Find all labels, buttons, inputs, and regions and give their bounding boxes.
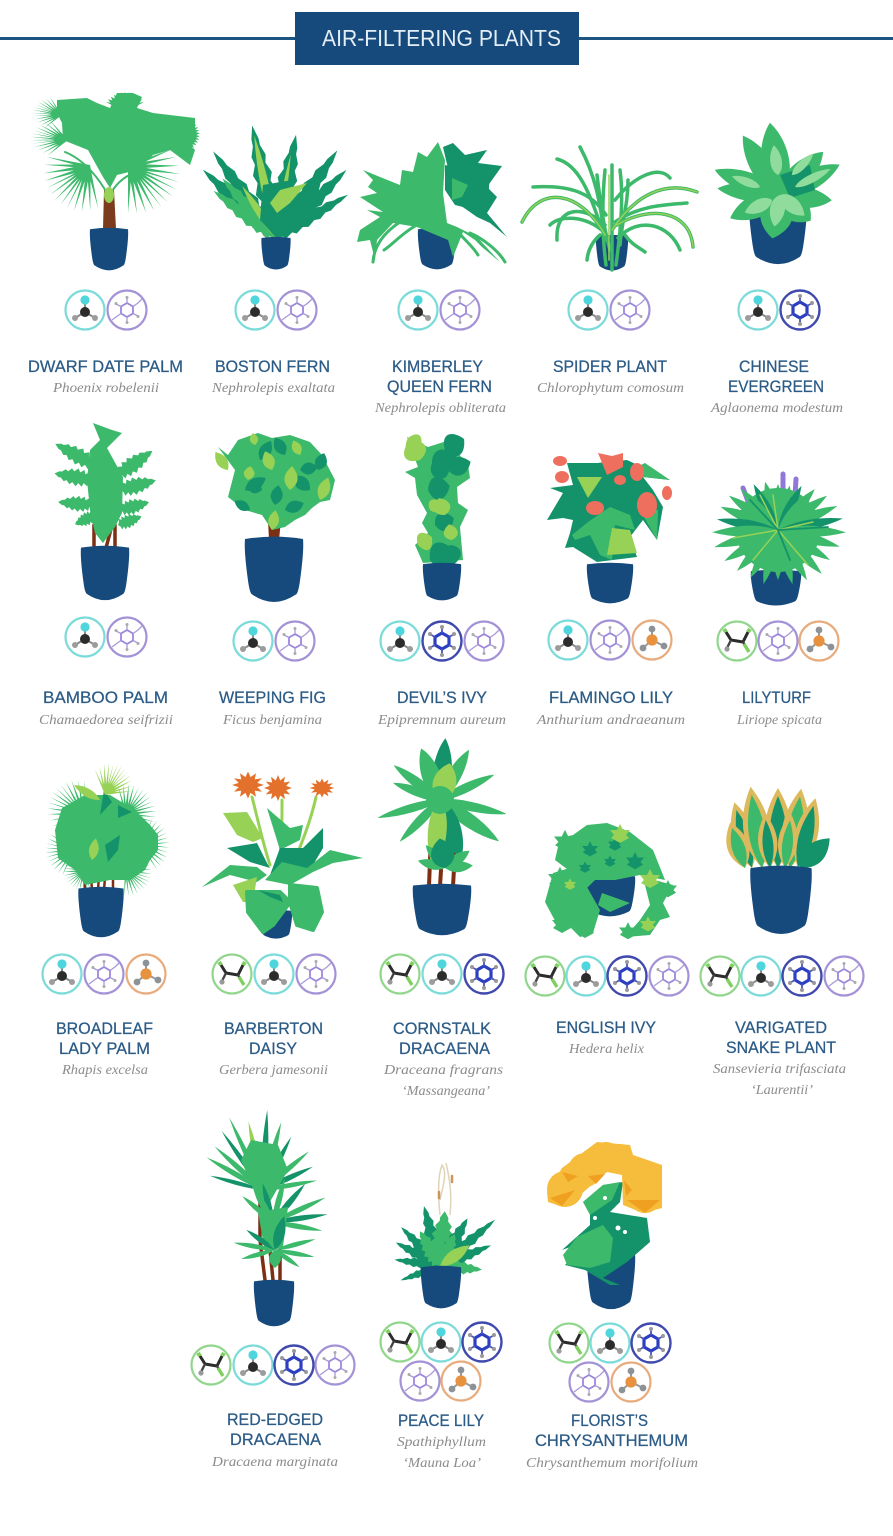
name: broadleaf lady palm: LADY PALM: [59, 1040, 150, 1058]
name: broadleaf lady palm: [56, 1020, 153, 1058]
name: red-edged dracaena: DRACAENA: [230, 1431, 321, 1449]
icon: trichloroethylene: [192, 1346, 230, 1384]
icon: formaldehyde: [42, 954, 82, 994]
name: kimberley queen fern: QUEEN FERN: [387, 378, 492, 396]
plant: red-edged dracaena: [205, 1110, 328, 1326]
chemical icons: [236, 290, 316, 330]
panel: spider plant: [522, 147, 697, 395]
panel: english ivy: [526, 823, 688, 1056]
icon: ammonia: [632, 620, 672, 660]
name: weeping fig: WEEPING FIG: [219, 689, 326, 707]
icon: ammonia: [612, 1362, 650, 1402]
chemical icons: [526, 956, 688, 996]
icon: formaldehyde: [548, 620, 588, 660]
species: draceana fragrans massangeana: Draceana fragrans: [383, 1062, 503, 1077]
plant: kimberley queen fern: [357, 142, 507, 269]
panel: dwarf date palm: [28, 92, 201, 395]
icon: formaldehyde: [66, 618, 104, 656]
panel: varigated snake plant: [700, 785, 864, 1097]
species: chlorophytum comosum: Chlorophytum comosum: [537, 380, 684, 395]
icon: formaldehyde: [254, 954, 294, 994]
panel: devil's ivy: [377, 429, 506, 727]
icon: formaldehyde: [568, 290, 608, 330]
icon: xylene: [464, 622, 504, 660]
species: draceana fragrans massangeana: ‘Massangeana’: [402, 1083, 491, 1098]
plant: spider plant: [522, 147, 697, 270]
name: chinese evergreen: CHINESE: [739, 358, 809, 376]
icon: xylene: [278, 290, 316, 330]
icon: formaldehyde: [380, 622, 420, 660]
name: florist's chrysanthemum: [535, 1412, 688, 1450]
species: dracaena marginata: Dracaena marginata: [211, 1454, 338, 1469]
icon: trichloroethylene: [526, 956, 564, 996]
species: spathiphyllum mauna loa: ‘Mauna Loa’: [403, 1455, 482, 1470]
plant: boston fern: [197, 123, 353, 270]
name: varigated snake plant: SNAKE PLANT: [726, 1039, 836, 1057]
chemical icons: [380, 1322, 502, 1400]
icon: xylene: [84, 954, 124, 994]
chemical icons: [192, 1346, 354, 1384]
panel: cornstalk dracaena: [376, 737, 507, 1098]
name: barberton daisy: BARBERTON: [224, 1020, 323, 1038]
icon: benzene: [274, 1346, 314, 1384]
plant: broadleaf lady palm: [36, 755, 172, 937]
chemical icons: [700, 956, 864, 996]
panel: barberton daisy: [202, 772, 363, 1077]
name: lilyturf: LILYTURF: [742, 689, 811, 707]
panel: boston fern: [197, 123, 353, 395]
icon: benzene: [462, 1322, 502, 1362]
icon: formaldehyde: [742, 956, 780, 996]
species: nephrolepis obliterata: Nephrolepis obliterata: [374, 400, 506, 415]
icon: formaldehyde: [566, 956, 606, 996]
name: red-edged dracaena: [227, 1411, 323, 1449]
icon: formaldehyde: [590, 1324, 630, 1362]
name: bamboo palm: BAMBOO PALM: [43, 689, 168, 707]
plant: devil's ivy: [399, 429, 474, 600]
name: florist's chrysanthemum: FLORIST’S: [571, 1412, 648, 1430]
name: barberton daisy: [224, 1020, 323, 1058]
icon: xylene: [610, 290, 650, 330]
name: devil's ivy: DEVIL’S IVY: [397, 689, 487, 707]
species: phoenix robelenii: Phoenix robelenii: [52, 380, 159, 395]
header rule: [0, 37, 893, 40]
panel: bamboo palm: [39, 423, 173, 727]
icon: benzene: [608, 956, 646, 996]
species: sansevieria trifasciata laurentii: [713, 1061, 846, 1097]
chemical icons: [568, 290, 650, 330]
chemical icons: [380, 954, 504, 994]
species: chrysanthemum morifolium: Chrysanthemum morifolium: [526, 1455, 698, 1470]
icon: formaldehyde: [66, 290, 104, 330]
icon: xylene: [108, 290, 146, 330]
chemical icons: [398, 290, 480, 330]
icon: ammonia: [800, 622, 838, 660]
species: sansevieria trifasciata laurentii: ‘Laurentii’: [751, 1082, 814, 1097]
name: flamingo lily: FLAMINGO LILY: [549, 689, 673, 707]
species: nephrolepis exaltata: Nephrolepis exaltata: [211, 380, 335, 395]
panel: flamingo lily: [536, 453, 685, 727]
name: dwarf date palm: DWARF DATE PALM: [28, 358, 183, 376]
icon: trichloroethylene: [212, 954, 252, 994]
chemical icons: [738, 290, 820, 330]
plant: peace lily: [393, 1163, 499, 1308]
icon: xylene: [758, 622, 798, 660]
icon: trichloroethylene: [380, 954, 420, 994]
icon: xylene: [316, 1346, 354, 1384]
panel: chinese evergreen: [710, 121, 844, 415]
icon: benzene: [780, 290, 820, 330]
species: anthurium andraeanum: Anthurium andraeanum: [536, 712, 685, 727]
plant: chinese evergreen: [711, 121, 844, 264]
panel: red-edged dracaena: [192, 1110, 354, 1469]
icon: xylene: [276, 622, 314, 660]
icon: benzene: [464, 954, 504, 994]
plant: varigated snake plant: [720, 785, 837, 934]
panel: lilyturf: [712, 474, 846, 727]
chemical icons: [66, 290, 146, 330]
plant: lilyturf: [712, 474, 846, 605]
name: barberton daisy: DAISY: [249, 1040, 297, 1058]
name: peace lily: PEACE LILY: [398, 1412, 484, 1430]
name: cornstalk dracaena: DRACAENA: [399, 1040, 490, 1058]
name: florist's chrysanthemum: CHRYSANTHEMUM: [535, 1432, 688, 1450]
chemical icons: [42, 954, 166, 994]
chemical icons: [550, 1324, 670, 1402]
pot: boston fern: [261, 237, 291, 270]
icon: benzene: [782, 956, 822, 996]
name: chinese evergreen: [728, 358, 824, 396]
icon: formaldehyde: [738, 290, 778, 330]
plant: english ivy: [545, 823, 677, 939]
chemical icons: [548, 620, 672, 660]
panel: florist's chrysanthemum: [526, 1142, 698, 1470]
species: sansevieria trifasciata laurentii: Sansevieria trifasciata: [713, 1061, 846, 1076]
icon: formaldehyde: [236, 290, 274, 330]
species: rhapis excelsa: Rhapis excelsa: [61, 1062, 148, 1077]
panel: broadleaf lady palm: [36, 755, 172, 1077]
species: gerbera jamesonii: Gerbera jamesonii: [219, 1062, 328, 1077]
icon: formaldehyde: [398, 290, 438, 330]
panel: weeping fig: [211, 432, 335, 727]
title banner: [295, 12, 579, 65]
chemical icons: [234, 622, 314, 660]
name: red-edged dracaena: RED-EDGED: [227, 1411, 323, 1429]
icon: ammonia: [126, 954, 166, 994]
species: spathiphyllum mauna loa: Spathiphyllum: [397, 1434, 486, 1449]
name: chinese evergreen: EVERGREEN: [728, 378, 824, 396]
species: spathiphyllum mauna loa: [397, 1434, 486, 1470]
icon: trichloroethylene: [380, 1322, 420, 1362]
chemical icons: [380, 622, 504, 660]
name: kimberley queen fern: KIMBERLEY: [392, 358, 483, 376]
icon: xylene: [590, 620, 630, 660]
icon: xylene: [650, 956, 688, 996]
icon: xylene: [400, 1362, 440, 1400]
icon: formaldehyde: [234, 622, 272, 660]
icon: xylene: [296, 954, 336, 994]
name: kimberley queen fern: [387, 358, 492, 396]
title banner: AIR-FILTERING PLANTS: [322, 25, 561, 51]
plant: flamingo lily: [547, 453, 672, 603]
plant: cornstalk dracaena: [376, 737, 507, 935]
species: aglaonema modestum: Aglaonema modestum: [710, 400, 843, 415]
name: varigated snake plant: [726, 1019, 836, 1057]
plant: bamboo palm: [51, 423, 158, 600]
icon: ammonia: [442, 1362, 480, 1400]
panel: peace lily: [380, 1163, 502, 1470]
icon: xylene: [440, 290, 480, 330]
icon: benzene: [422, 622, 462, 660]
icon: formaldehyde: [422, 954, 462, 994]
name: cornstalk dracaena: [393, 1020, 491, 1058]
plant: weeping fig: [211, 432, 335, 602]
species: liriope spicata: Liriope spicata: [736, 712, 822, 727]
icon: trichloroethylene: [700, 956, 740, 996]
species: ficus benjamina: Ficus benjamina: [222, 712, 322, 727]
icon: trichloroethylene: [550, 1324, 588, 1362]
plant: dwarf date palm: [29, 92, 201, 270]
panel: kimberley queen fern: [357, 142, 507, 415]
icon: formaldehyde: [234, 1346, 272, 1384]
icon: benzene: [632, 1324, 670, 1362]
icon: trichloroethylene: [718, 622, 756, 660]
chemical icons: [66, 618, 146, 656]
species: epipremnum aureum: Epipremnum aureum: [377, 712, 506, 727]
plant: barberton daisy: [202, 772, 363, 939]
icon: xylene: [570, 1362, 608, 1402]
chemical icons: [212, 954, 336, 994]
chemical icons: [718, 622, 838, 660]
name: spider plant: SPIDER PLANT: [553, 358, 667, 376]
icon: formaldehyde: [422, 1322, 460, 1362]
species: draceana fragrans massangeana: [383, 1062, 503, 1098]
name: english ivy: ENGLISH IVY: [556, 1019, 656, 1037]
name: boston fern: BOSTON FERN: [215, 358, 330, 376]
name: cornstalk dracaena: CORNSTALK: [393, 1020, 491, 1038]
species: chamaedorea seifrizii: Chamaedorea seifrizii: [39, 712, 173, 727]
name: varigated snake plant: VARIGATED: [735, 1019, 827, 1037]
species: hedera helix: Hedera helix: [568, 1041, 644, 1056]
name: broadleaf lady palm: BROADLEAF: [56, 1020, 153, 1038]
icon: xylene: [108, 618, 146, 656]
icon: xylene: [824, 956, 864, 996]
plant: florist's chrysanthemum: [547, 1142, 662, 1309]
